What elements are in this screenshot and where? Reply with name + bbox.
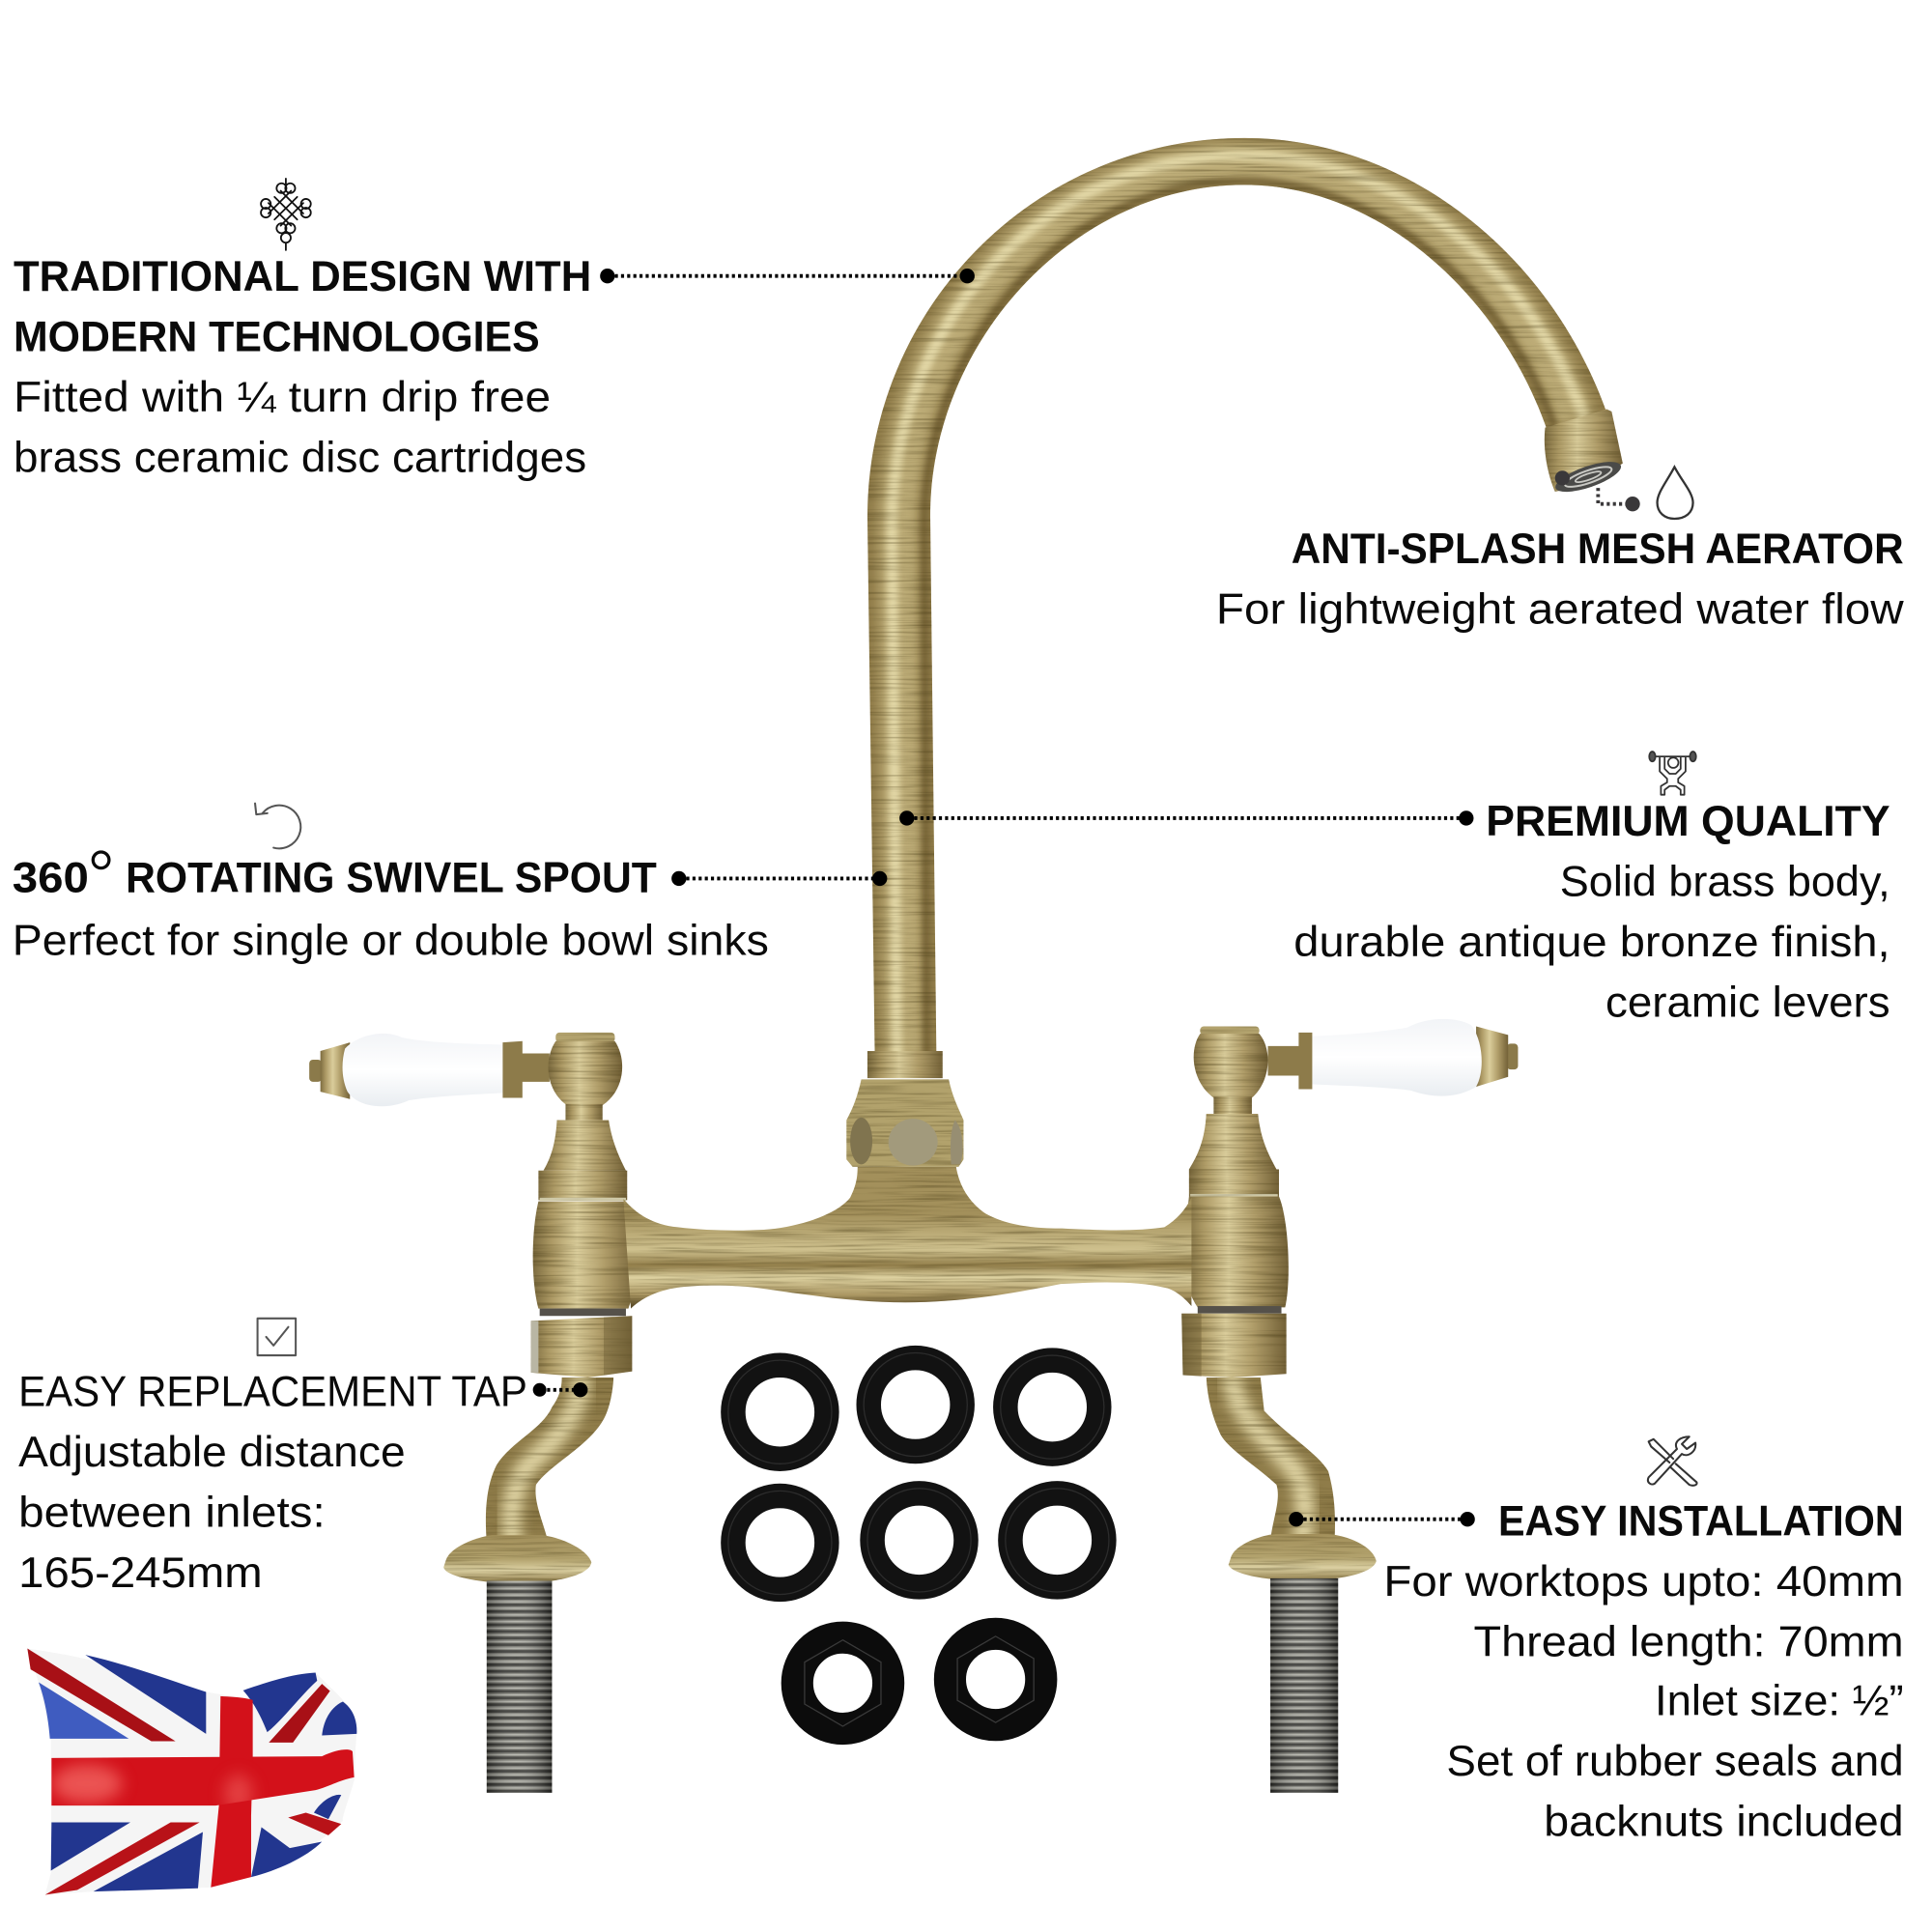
description	[1293, 858, 1890, 1026]
description: Solid brass body,	[1560, 858, 1890, 905]
heading: TRADITIONAL DESIGN WITH	[14, 253, 591, 300]
backnuts	[797, 1634, 1041, 1729]
seal ridges	[728, 1353, 1109, 1595]
heading: ROTATING SWIVEL SPOUT	[126, 854, 657, 901]
description: ceramic levers	[1605, 979, 1890, 1026]
description: durable antique bronze finish,	[1293, 919, 1890, 966]
callout: aerator	[1216, 467, 1904, 633]
hex hub	[846, 1079, 963, 1167]
description: between inlets:	[18, 1489, 326, 1536]
icon: rotation arrow	[255, 804, 300, 848]
icon: endless knot	[254, 177, 317, 250]
aerator collar	[1545, 409, 1623, 492]
description: For lightweight aerated water flow	[1216, 585, 1904, 633]
left base flange	[443, 1535, 591, 1583]
callout: easy installation	[1289, 1436, 1904, 1846]
description: 165-245mm	[18, 1549, 263, 1597]
callout: traditional design	[14, 177, 975, 482]
aerator mesh	[1552, 456, 1624, 498]
description	[18, 1429, 406, 1597]
left ceramic lever	[309, 1034, 550, 1106]
icon: water drop	[1658, 467, 1693, 519]
right ceramic lever	[1267, 1019, 1518, 1096]
right valve ball and cone	[1189, 1026, 1279, 1197]
curved swivel spout	[867, 138, 1623, 1060]
pointer to leg	[533, 1382, 587, 1397]
heading: EASY INSTALLATION	[1498, 1497, 1904, 1545]
heading: 360	[13, 854, 89, 901]
right valve and handle	[1181, 1019, 1518, 1793]
rubber seals and backnuts	[728, 1353, 1109, 1729]
description: For worktops upto: 40mm	[1383, 1558, 1904, 1605]
callout: premium quality	[899, 752, 1890, 1026]
bridge arms	[623, 1167, 1191, 1309]
description: Adjustable distance	[18, 1429, 406, 1476]
Union Jack flag	[27, 1649, 356, 1894]
left threaded rod	[487, 1580, 552, 1793]
left coupling nut	[531, 1309, 632, 1378]
pointer to right leg	[1289, 1512, 1475, 1526]
pointer to brass body	[899, 810, 1474, 826]
description: Set of rubber seals and	[1446, 1738, 1904, 1785]
right coupling nut	[1181, 1306, 1287, 1378]
icon: check box	[258, 1319, 296, 1355]
heading	[14, 253, 591, 361]
description: brass ceramic disc cartridges	[14, 435, 586, 482]
callout: easy replacement	[18, 1319, 587, 1597]
icon: weightlifter	[1649, 752, 1696, 795]
description: Fitted with ¼ turn drip free	[14, 374, 551, 421]
flag sheen	[51, 1764, 253, 1812]
left valve and handle	[309, 1033, 639, 1793]
heading: PREMIUM QUALITY	[1486, 798, 1890, 845]
tap product illustration	[309, 138, 1624, 1793]
right base flange	[1229, 1534, 1377, 1580]
description: Inlet size: ½”	[1655, 1678, 1904, 1725]
pointer to spout arc	[600, 269, 975, 283]
description: Perfect for single or double bowl sinks	[13, 918, 769, 965]
spout collar	[867, 1051, 943, 1078]
left valve body	[533, 1202, 639, 1309]
right S-shaped leg	[1206, 1378, 1335, 1535]
left valve ball and cone	[538, 1033, 627, 1201]
description	[14, 374, 586, 482]
callout: swivel spout	[13, 804, 887, 965]
right valve body	[1185, 1197, 1289, 1307]
left S-shaped leg	[485, 1378, 614, 1536]
central bridge and hub	[623, 1051, 1191, 1309]
description	[1383, 1558, 1904, 1846]
description: Thread length: 70mm	[1474, 1618, 1904, 1665]
rubber seals	[733, 1358, 1104, 1589]
pointer to spout	[671, 871, 887, 886]
description: backnuts included	[1544, 1799, 1904, 1846]
pointer to aerator	[1555, 470, 1640, 511]
icon: spanner and screwdriver	[1648, 1436, 1697, 1486]
heading: EASY REPLACEMENT TAP	[18, 1368, 527, 1415]
right threaded rod	[1270, 1578, 1338, 1793]
heading: MODERN TECHNOLOGIES	[14, 314, 540, 361]
heading: ANTI-SPLASH MESH AERATOR	[1292, 526, 1904, 573]
